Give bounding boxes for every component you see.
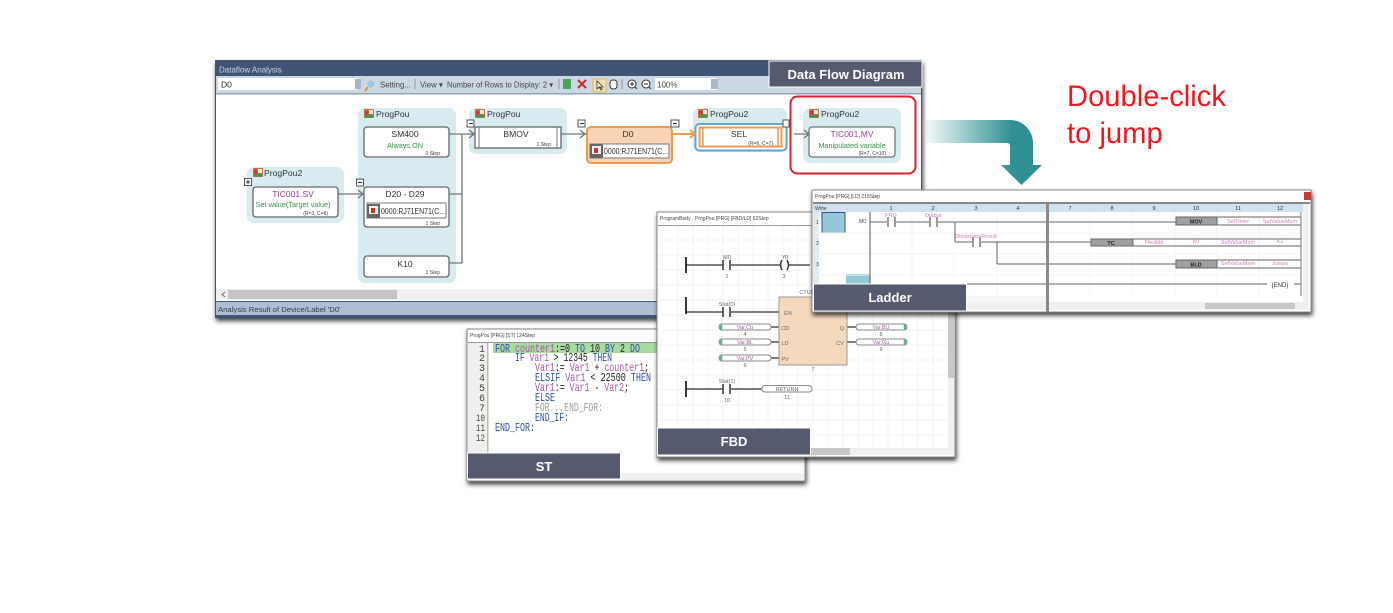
ladder instruction boxes: K1: [1277, 239, 1283, 245]
code: line numbers: 3: [479, 364, 485, 375]
node group: SEL: [693, 108, 789, 152]
callout text: Double-click to jump: Double-click: [1067, 81, 1226, 113]
ladder scrollbars: [967, 204, 1309, 310]
ladder instruction boxes: SetTimer: [1227, 219, 1249, 225]
node group: ProgPou2 source: ProgPou2: [264, 168, 302, 178]
node group: ProgPou devices: 0000:RJ71EN71(C...: [381, 207, 445, 216]
node group: ProgPou devices: Always ON: [387, 141, 423, 150]
node group: ProgPou devices: ProgPou: [376, 109, 410, 119]
ladder instruction boxes: Jumps: [1272, 261, 1288, 267]
code: line numbers: 11: [476, 424, 485, 435]
node: D0 highlighted: D0: [622, 129, 634, 139]
code: structured text: ELSE: [535, 391, 555, 405]
ladder rungs: [870, 212, 1301, 296]
panel: ST editor window: [467, 329, 805, 481]
rung: function block counter: 8: [879, 332, 883, 338]
rung: function block counter: CTUD: [799, 290, 815, 296]
ladder instruction boxes: TC: [1107, 241, 1115, 247]
node group: ProgPou devices: K10: [397, 259, 413, 269]
ladder column header: Write: [815, 206, 827, 212]
ladder column header: 11: [1235, 206, 1241, 212]
node group: ProgPou2 TIC001.MV: (R=7, C=10): [858, 151, 886, 157]
ladder column header: [813, 204, 1304, 212]
label: ST: ST: [536, 459, 552, 474]
window title: Dataflow Analysis: [219, 66, 282, 74]
ladder column header: 10: [1193, 206, 1199, 212]
code: line numbers: 5: [479, 384, 485, 395]
ladder column header: 4: [1016, 206, 1020, 212]
ladder instruction boxes: DimensionResult: [955, 234, 997, 240]
rung: function block counter: 6: [743, 363, 747, 369]
toolbar: 100%: [657, 80, 677, 90]
code: line numbers: 7: [479, 404, 485, 415]
rung: RETURN: 10: [724, 398, 730, 404]
node: D0 highlighted: 0000:RJ71EN71(C...: [604, 147, 668, 156]
code: structured text: IF Var1 > 12345 THEN: [515, 351, 612, 365]
flow connectors: [338, 130, 809, 263]
node group: ProgPou devices: D20 - D29: [385, 189, 425, 199]
rung: function block counter: Var.PV: [737, 356, 754, 362]
panel: FBD editor window: ProgramBody · ProgPou [PRG] [FBD/LD] 62Step: [660, 216, 769, 222]
ladder center splitter: [1046, 204, 1049, 312]
label: Data Flow Diagram: [769, 61, 922, 87]
code: structured text: [495, 342, 651, 435]
ladder column header: 9: [1152, 206, 1156, 212]
rung: function block counter: Var.BL: [737, 340, 753, 346]
node group: BMOV: ProgPou: [487, 109, 521, 119]
label: Ladder: Ladder: [868, 290, 912, 305]
rung: function block counter: CV: [836, 341, 844, 347]
node group: ProgPou devices: 0 Step: [426, 151, 440, 157]
rung: function block counter: EN: [784, 311, 792, 317]
toolbar: [216, 76, 921, 94]
rung: M0 coil: 3: [782, 274, 786, 280]
rung: function block counter: Q: [840, 326, 845, 332]
rung: RETURN: 11: [784, 395, 790, 401]
ladder instruction boxes: SetValueMem: [1263, 219, 1297, 225]
rung: RETURN: RETURN: [776, 387, 798, 393]
callout text: Double-click to jump: to jump: [1067, 118, 1163, 150]
node group: ProgPou2 source: (R=3, C=8): [303, 211, 328, 217]
rung: function block counter: LD: [781, 341, 789, 347]
node group: ProgPou devices: SM400: [391, 129, 419, 139]
rung: function block counter: Var.BU: [872, 325, 890, 331]
code: line numbers: 1: [479, 345, 485, 356]
toolbar: View ▾: [420, 80, 443, 90]
ladder column header: 7: [1068, 206, 1072, 212]
node group: ProgPou2 TIC001.MV: ProgPou2: [821, 109, 859, 119]
label: Ladder: [814, 284, 966, 311]
rung: function block counter: [686, 290, 907, 373]
panel: ST editor window: ProgPou [PRG] [ST] 124Step: [470, 333, 535, 339]
ladder instruction boxes: SetValueMem: [1221, 261, 1255, 267]
code: line numbers: 10: [476, 414, 485, 425]
panel: data flow analysis window: [215, 60, 922, 318]
rung: M0 coil: M0: [723, 255, 731, 261]
rung: function block counter: Stat(0): [719, 302, 735, 308]
code: line numbers: 2: [479, 354, 485, 365]
toolbar: Number of Rows to Display: 2 ▾: [447, 80, 553, 90]
ladder row sidebar: 3: [816, 262, 819, 268]
ladder instruction boxes: K0: [1193, 239, 1199, 245]
node group: BMOV: [467, 108, 567, 154]
label: Data Flow Diagram: Data Flow Diagram: [787, 67, 905, 82]
toolbar: Setting...: [380, 80, 411, 90]
ladder instruction boxes: BLD: [1190, 262, 1202, 268]
panel: ladder editor window: ProgPou [PRG] [LD] 215Step: [815, 194, 880, 200]
rung: function block counter: 4: [743, 332, 747, 338]
rung: function block counter: 7: [811, 367, 815, 373]
node group: ProgPou2 TIC001.MV: [803, 108, 901, 163]
node: D0 highlighted: [578, 120, 679, 163]
rung: RETURN: [686, 379, 812, 404]
label: FBD: FBD: [721, 434, 747, 449]
ladder column header: 12: [1277, 206, 1283, 212]
ladder row sidebar: M0: [859, 219, 866, 225]
toolbar: D0: [221, 80, 232, 90]
ladder instruction boxes: MOV: [1190, 220, 1203, 226]
rung: M0 coil: [686, 255, 810, 280]
node group: ProgPou2 source: [244, 167, 344, 223]
ladder instruction boxes: Flexible: [1145, 240, 1163, 246]
ladder column header: 2: [931, 206, 935, 212]
rung: M0 coil: Y0: [782, 255, 788, 261]
status bar: Analysis Result of Device/Label 'D0': [218, 305, 341, 314]
status bar: [216, 302, 921, 315]
code: structured text: FOR...END_FOR:: [535, 401, 603, 415]
ladder column header: 1: [889, 206, 893, 212]
horizontal scrollbar: [216, 289, 921, 300]
code: line numbers: 6: [479, 394, 485, 405]
label: FBD: [658, 428, 810, 455]
node group: ProgPou2 TIC001.MV: TIC001.MV: [830, 129, 874, 139]
callout: red selection box: [790, 96, 916, 174]
node group: ProgPou devices: 1 Step: [426, 270, 440, 276]
panel: ladder editor window: [812, 190, 1311, 312]
rung: function block counter: Var.Cu: [737, 325, 753, 331]
node group: SEL: ProgPou2: [710, 109, 748, 119]
node group: SEL: SEL: [731, 129, 747, 139]
node group: ProgPou2 source: TIC001.SV: [272, 189, 314, 199]
code: line numbers: 4: [479, 374, 485, 385]
node group: ProgPou devices: [356, 108, 456, 283]
code: structured text: END_IF:: [535, 411, 569, 425]
ladder instruction boxes: {END}: [1272, 283, 1288, 289]
ladder column header: 3: [974, 206, 978, 212]
rung: M0 coil: 1: [725, 274, 729, 280]
node group: BMOV: 1 Step: [537, 142, 551, 148]
FBD scrollbars: [811, 226, 954, 455]
rung: function block counter: Var.Gu: [873, 340, 889, 346]
node group: ProgPou2 source: Set value(Target value): [255, 200, 331, 209]
ladder column header: 8: [1110, 206, 1114, 212]
code: structured text: Var1:= Var1 + counter1;: [535, 361, 649, 375]
label: ST: [468, 453, 620, 479]
code: structured text: END_FOR:: [495, 421, 535, 435]
rung: function block counter: PV: [781, 357, 789, 363]
ladder instruction boxes: Output: [925, 213, 942, 219]
node group: SEL: (R=6, C=7): [748, 141, 773, 147]
rung: function block counter: 5: [743, 347, 747, 353]
code: line numbers: 12: [476, 434, 485, 445]
ladder row sidebar: 2: [816, 241, 819, 247]
ladder row sidebar: [813, 212, 870, 296]
ladder instruction boxes: PRG: [885, 213, 897, 219]
ladder row sidebar: 1: [816, 220, 819, 226]
node group: ProgPou2 TIC001.MV: Manipulated variable: [818, 141, 886, 150]
node group: ProgPou devices: 1 Step: [426, 221, 440, 227]
rung: function block counter: CD: [781, 326, 789, 332]
ladder instruction boxes: [885, 213, 1297, 289]
code: structured text: FOR counter1:=0 TO 10 BY 2 DO: [495, 342, 640, 356]
rung: function block counter: 9: [879, 347, 883, 353]
code: line numbers: [476, 345, 485, 445]
rung: RETURN: Stat(1): [719, 379, 735, 385]
arrow: jump to editors: [925, 120, 1042, 185]
ladder instruction boxes: SetValueMem: [1221, 240, 1255, 246]
panel: FBD editor window: [657, 212, 955, 457]
code: structured text: Var1:= Var1 - Var2;: [535, 381, 629, 395]
node group: BMOV: BMOV: [503, 129, 529, 139]
code: structured text: ELSIF Var1 < 22500 THEN: [535, 371, 651, 385]
